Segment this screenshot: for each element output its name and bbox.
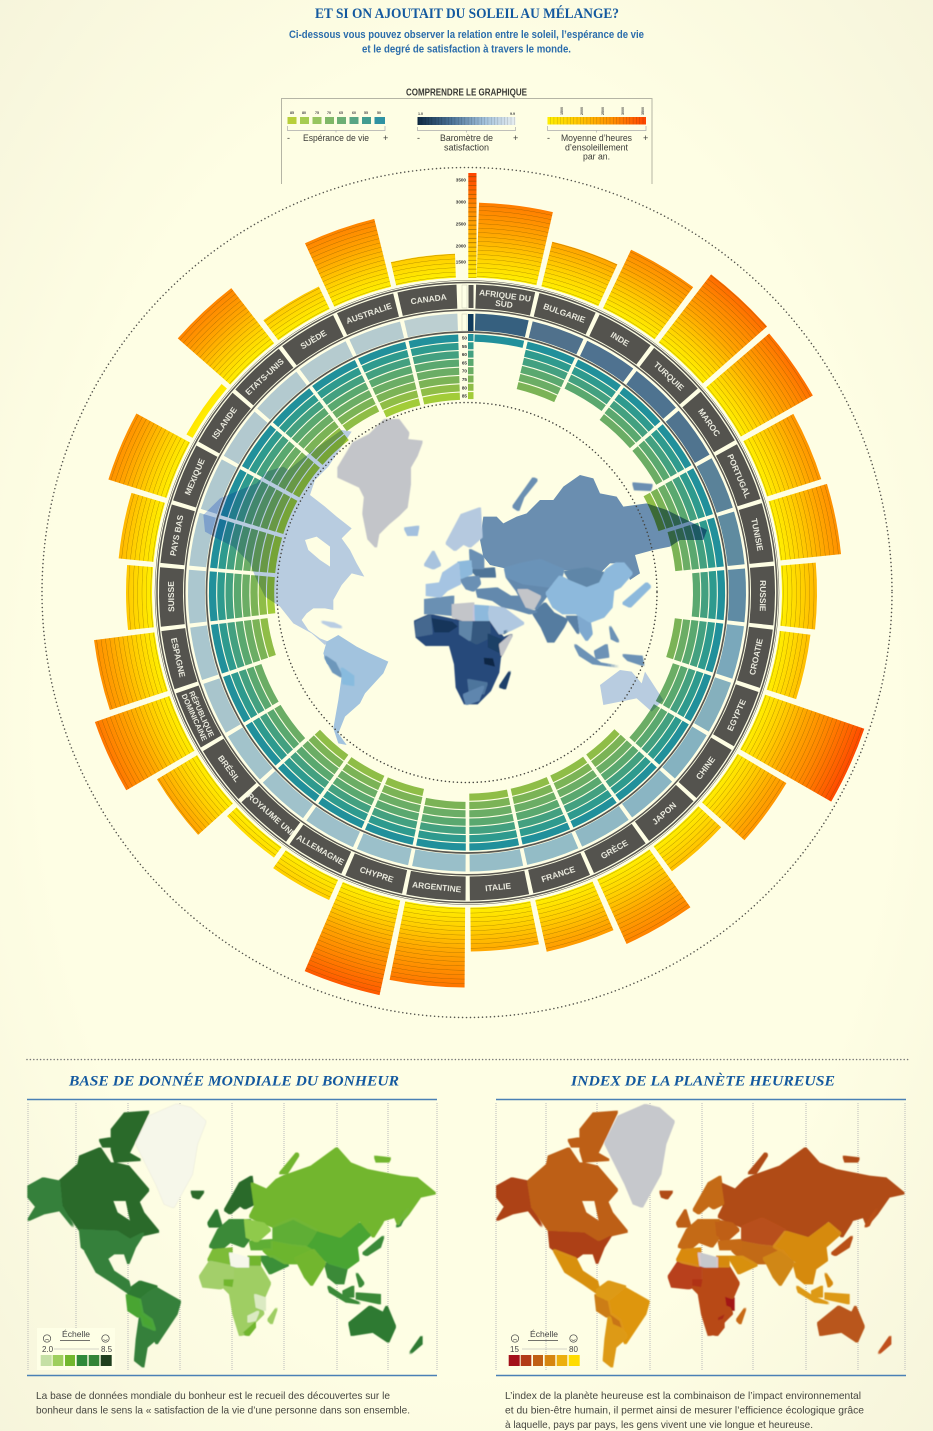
sector: Maroc: MAROC [696,407,722,438]
Madagascar [500,672,510,688]
life expectancy scale: 75 [462,377,467,382]
map rules and grid [496,1100,906,1376]
legend: espérance de vie: 65 [339,111,343,115]
legend: espérance de vie: 60 [352,111,356,115]
sector: République Dominicaine: RÉPUBLIQUE [187,690,216,739]
legend: baromètre de satisfaction [417,112,518,152]
description [36,1390,410,1416]
scale legend: 8.5 [101,1345,113,1354]
Scandinavia [447,508,482,550]
sector: Suisse [105,230,829,955]
Western Europe [427,563,460,597]
legend: espérance de vie: 80 [302,111,306,115]
legend: baromètre de satisfaction: 1.0 [418,112,423,116]
Mauritania [416,616,432,636]
sector: Islande: ISLANDE [210,405,239,441]
Central Europe [458,561,472,578]
Chad [460,622,474,640]
scale legend: Échelle [530,1330,559,1339]
Africa [415,615,512,703]
legend: baromètre de satisfaction: + [513,133,518,143]
legend: espérance de vie [287,111,388,143]
Turkey and Iran [477,588,537,613]
scale legend: 2.0 [42,1345,54,1354]
sector: République Dominicaine [0,80,933,1105]
Cuba [322,622,342,627]
Somalia [500,635,512,655]
sector: Pays Bas: PAYS BAS [168,514,186,557]
Myanmar [567,617,578,633]
legend: heures d'ensoleillement: d’ensoleillement [565,142,628,152]
legend frame [282,98,652,184]
Afghanistan [518,590,540,608]
life expectancy scale: 65 [462,360,467,365]
legend: baromètre de satisfaction: 9.9 [510,112,515,116]
description: et du bien-être humain, il permet ainsi de mesurer l’efficience écologique grâce [505,1404,864,1416]
panel: index de la planète heureuse [496,1072,906,1431]
sector: Inde: INDE [609,330,631,349]
satisfaction marker [462,314,474,331]
sector: Tunisie: TUNISIE [749,517,766,552]
China [547,563,632,622]
legend: baromètre de satisfaction: - [417,133,420,143]
scale column at top of chart [456,173,476,399]
sector: Afrique du Sud: SUD [495,298,513,310]
North America [203,430,364,645]
heading: BASE DE DONNÉE MONDIALE DU BONHEUR [68,1072,399,1090]
life expectancy scale: 70 [462,369,467,374]
sector: France: FRANCE [540,864,577,884]
ring separators [155,280,779,904]
central map: landmasses overlapping the rings [203,430,707,745]
sector: Australie: AUSTRALIE [345,300,394,326]
sector: Suède: SUÈDE [298,327,329,351]
legend: heures d'ensoleillement: 3000 [621,107,625,115]
life expectancy scale: 80 [462,385,467,390]
legend panel: comprendre le graphique [282,88,652,184]
label ring marker [462,285,474,308]
South America [323,635,388,745]
legend: espérance de vie: + [383,133,388,143]
sector: Japon: JAPON [650,800,678,827]
intro text: et le degré de satisfaction à travers le monde. [362,44,571,56]
sector: Italie [63,189,871,996]
Balkans [460,577,480,591]
West Africa dark [430,617,460,633]
radial chart [0,41,933,1144]
sector: Etats-Unis: ETATS-UNIS [243,356,286,397]
life expectancy scale: 60 [462,352,467,357]
sector: Argentine: ARGENTINE [412,879,462,894]
Indochina [578,617,592,640]
legend: heures d'ensoleillement: 2500 [601,107,605,115]
central world map [322,420,652,704]
Iceland [405,527,418,535]
heading: INDEX DE LA PLANÈTE HEUREUSE [570,1072,835,1090]
legend: heures d'ensoleillement: par an. [583,152,610,162]
sector: Portugal: PORTUGAL [725,452,753,500]
legend: heures d'ensoleillement: 2000 [580,107,584,115]
Russia [480,475,707,580]
scale legend: Échelle [62,1330,91,1339]
happiness world map [28,1105,435,1367]
sector: Brésil: BRÉSIL [216,753,243,784]
sector: Italie: ITALIE [485,880,512,893]
sunshine hours scale: 2000 [456,244,466,248]
legend: heures d'ensoleillement: + [643,133,648,143]
scale legend: 80 [569,1345,578,1354]
Tanzania [483,657,497,668]
sector: Russie [101,226,833,959]
Egypt [474,606,490,620]
life expectancy scale: 55 [462,344,467,349]
outer dotted circle [42,168,892,1018]
legend: espérance de vie: 55 [364,111,368,115]
legend: heures d'ensoleillement: - [547,133,550,143]
intro text [289,29,644,56]
sector: Suisse: SUISSE [166,581,176,612]
sunshine hours scale: 3500 [456,178,466,182]
Yemen [502,627,513,633]
panel: base de données mondiale du bonheur [27,1072,437,1416]
sunshine hours scale: 3000 [456,200,466,204]
Greenland [338,420,422,547]
sector: Canada [67,193,867,992]
Bolivia [342,668,353,685]
Southern Africa [468,680,487,693]
Baltics and Belarus [470,550,483,568]
sector: Royaume Uni: ROYAUME UNI [245,791,296,837]
description: L’index de la planète heureuse est la combinaison de l’impact environnemental [505,1390,861,1402]
sector: République Dominicaine: DOMINICAINE [180,692,209,742]
India [533,603,567,642]
sector: Bulgarie: BULGARIE [542,301,587,325]
sector: Espagne: ESPAGNE [169,637,188,679]
sector: Chine: CHINE [694,754,717,781]
Saudi Arabia [488,607,523,633]
legend: heures d'ensoleillement: 1500 [560,107,564,115]
Mongolia [565,568,605,588]
sector: Croatie: CROATIE [747,637,765,676]
legend: heures d'ensoleillement: 3500 [641,107,645,115]
sector: Egypte: EGYPTE [725,697,748,733]
description: La base de données mondiale du bonheur est le recueil des découvertes sur le [36,1390,390,1402]
Novaya Zemlya [513,478,652,510]
legend: baromètre de satisfaction: satisfaction [444,142,489,152]
sector: Turquie: TURQUIE [652,360,686,393]
Sudan [470,621,490,643]
sunshine hours scale [456,173,476,278]
description: à laquelle, pays par pays, les gens vivent une vie longue et heureuse. [505,1419,813,1431]
legend: baromètre de satisfaction: Baromètre de [440,133,493,143]
happy planet world map [497,1105,904,1367]
legend: heures d'ensoleillement: Moyenne d’heures [561,133,632,143]
UK [425,552,440,568]
Japan [623,583,650,607]
title: ET SI ON AJOUTAIT DU SOLEIL AU MÉLANGE? [315,5,619,22]
sector: Chypre: CHYPRE [358,864,395,885]
legend heading: COMPRENDRE LE GRAPHIQUE [406,88,527,98]
sector: Allemagne: ALLEMAGNE [295,832,346,867]
Libya [453,603,474,623]
sector: Canada: CANADA [410,292,447,306]
section divider [27,1058,908,1060]
Maghreb [425,597,453,615]
scale legend [509,1330,580,1366]
Kazakhstan [505,560,563,590]
life expectancy scale: 50 [462,336,467,340]
sunshine hours scale: 1500 [456,260,466,264]
scale legend: 15 [510,1345,519,1354]
Central Asia [507,577,550,608]
Australia [600,670,663,712]
map rules and grid [27,1100,437,1376]
Philippines [610,627,618,642]
sector: Argentine [42,168,892,1017]
sector: Grèce: GRÈCE [598,836,630,861]
description: bonheur dans le sens la « satisfaction de la vie d’une personne dans son ensemble. [36,1404,410,1416]
Peru [325,657,342,677]
Indonesia [575,645,643,667]
intro text: Ci-dessous vous pouvez observer la relation entre le soleil, l’espérance de vie [289,29,644,41]
sector: Afrique du Sud [37,163,897,1022]
legend: espérance de vie: Espérance de vie [303,133,369,143]
sector: Russie: RUSSIE [758,580,768,612]
sector: Afrique du Sud: AFRIQUE DU [479,287,532,304]
sector: Mexique: MEXIQUE [182,457,207,496]
sunshine hours scale: 2500 [456,222,466,226]
legend: espérance de vie: 50 [377,111,381,115]
life expectancy scale: 85 [462,394,467,399]
legend: espérance de vie: 75 [315,111,319,115]
scale legend [37,1328,115,1370]
South Africa [464,687,483,704]
inner dotted circle [277,402,657,782]
Ethiopia [487,632,503,655]
legend: espérance de vie: - [287,133,290,143]
description [505,1390,864,1431]
life expectancy scale [462,334,474,399]
legend: espérance de vie: 70 [327,111,331,115]
Ukraine [472,568,495,577]
legend: espérance de vie: 85 [290,111,294,115]
legend: heures d'ensoleillement [547,107,648,162]
